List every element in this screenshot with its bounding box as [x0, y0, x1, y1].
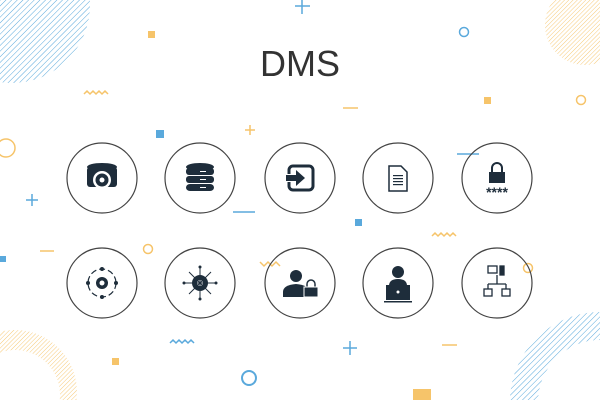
icon: database — [186, 163, 214, 191]
icon: password lock — [486, 163, 508, 200]
decoration: top-right striped circle — [545, 0, 600, 65]
decoration: bottom-left striped ring — [0, 330, 77, 400]
icon: password lock: **** — [486, 184, 508, 200]
icon: network computers — [484, 266, 510, 296]
icon grid — [66, 142, 533, 319]
icon: user laptop — [384, 266, 412, 302]
icon: sign-in — [280, 166, 313, 190]
icon: gear hub — [182, 266, 218, 300]
decoration: top-left striped circle — [0, 0, 90, 83]
icon: document — [389, 166, 407, 191]
decoration: bottom-right striped ring — [510, 312, 600, 400]
title: DMS — [260, 43, 340, 84]
icon: gear network dashed — [86, 267, 118, 299]
icon: user lock — [283, 270, 318, 297]
icon: database gear — [87, 163, 117, 189]
